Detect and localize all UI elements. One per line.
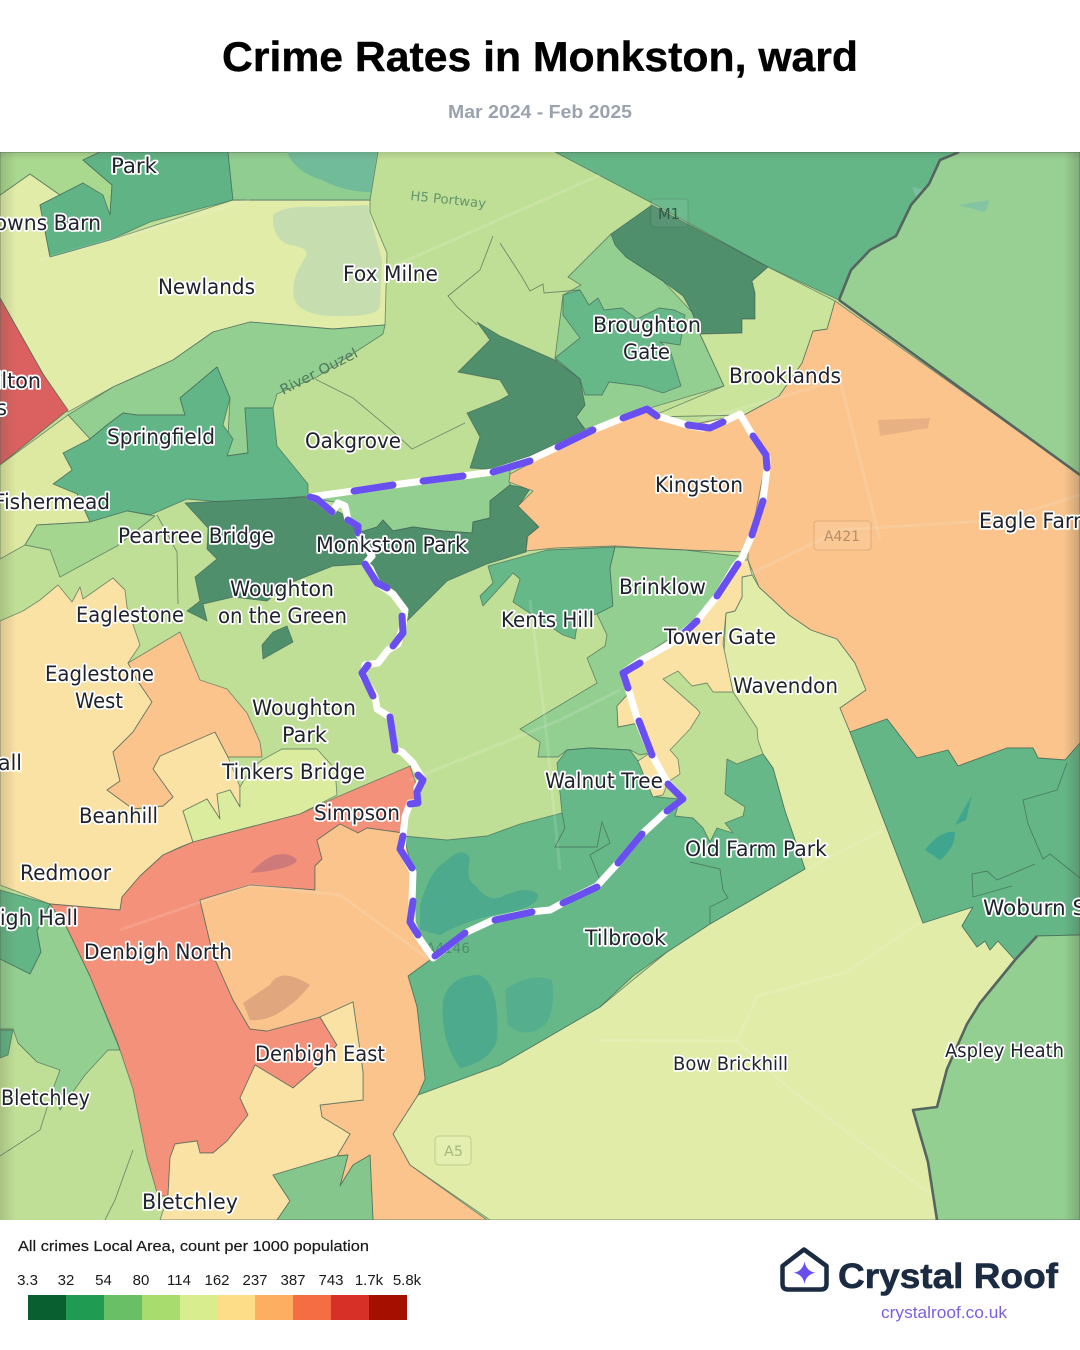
place name labels: Park: [282, 723, 328, 747]
region: top left: [0, 152, 112, 215]
legend colour scale: [28, 1295, 407, 1320]
region: Aspley Heath: [913, 935, 1080, 1220]
place name labels: Redmoor: [20, 861, 111, 885]
region: Giffard Park: [228, 152, 378, 200]
choropleth map: [0, 152, 1080, 1220]
place name labels: Bletchley: [1, 1086, 90, 1110]
map details: thin boundaries: [0, 236, 1080, 1220]
place name labels: Fox Milne: [343, 262, 438, 286]
road label: A421: A421: [824, 529, 860, 545]
place name labels: Walnut Tree: [545, 769, 663, 793]
legend values: [17, 1272, 422, 1289]
region: Milton: [0, 298, 68, 465]
place name labels: Kents Hill: [501, 608, 594, 632]
place name labels: on the Green: [218, 604, 347, 628]
place name labels: Bow Brickhill: [673, 1053, 788, 1075]
title: Crime Rates in Monkston, ward: [222, 33, 858, 80]
legend values: 743: [318, 1272, 344, 1289]
legend values: 114: [167, 1272, 191, 1289]
map edge vignette: [0, 152, 1080, 1220]
place name labels: Eaglestone: [76, 603, 184, 627]
region: north-east fields: [839, 152, 1080, 475]
region: Fishermead lower: [25, 511, 155, 577]
logo: Crystal Roof: [780, 1247, 1058, 1322]
region: Park: [40, 152, 233, 257]
ward boundary: Monkston: [310, 409, 767, 958]
region: Springfield: [53, 367, 308, 522]
place name labels: Tinkers Bridge: [221, 760, 365, 784]
place name labels: Tower Gate: [663, 625, 776, 649]
place name labels: Eaglestone: [45, 662, 154, 686]
place name labels: Park: [111, 154, 158, 178]
region: Bow Brickhill: [393, 575, 1015, 1220]
region: Woughton blob: [262, 626, 293, 659]
place name labels: Beanhill: [79, 804, 158, 828]
place name labels: Wavendon: [733, 674, 838, 698]
legend: [17, 1238, 422, 1320]
place name labels: Bletchley: [142, 1190, 238, 1214]
subtitle: date range: Mar 2024 - Feb 2025: [448, 101, 632, 122]
road label: A5: A5: [444, 1144, 463, 1160]
road label: H5 Portway: H5 Portway: [410, 189, 487, 212]
place name labels: Brinklow: [619, 575, 706, 599]
region: Monkston north: [310, 470, 510, 533]
road label: A4146: A4146: [426, 941, 470, 957]
road label: M1: M1: [658, 205, 680, 223]
place name labels: West: [75, 689, 123, 713]
region: Eagle Farm: [744, 301, 1080, 766]
region: Broughton Gate: [555, 290, 685, 395]
place name labels: [0, 154, 1080, 1214]
region: Broughton north fields: [555, 152, 959, 300]
legend values: 3.3: [17, 1272, 38, 1289]
website: crystalroof.co.uk: [881, 1304, 1008, 1322]
region: Tower Gate: [617, 560, 752, 797]
region: Tilbrook and Walnut Tree: [403, 748, 805, 1095]
region: Bletchley south green: [273, 1155, 373, 1220]
region: Denbigh orange: [200, 824, 487, 1220]
region: Willen lake: [273, 205, 382, 316]
region: Tinkers Bridge: [183, 749, 337, 842]
place name labels: Aspley Heath: [945, 1040, 1064, 1062]
region: Denbigh East cream: [160, 1002, 363, 1220]
region: Denbigh North: [50, 766, 418, 1196]
legend values: 237: [242, 1272, 268, 1289]
road label: A5: [435, 1136, 471, 1165]
region: Newlands: [0, 174, 387, 412]
region: Fishermead: [0, 415, 90, 559]
road label: A421: [814, 521, 871, 550]
region: Kents Hill: [480, 547, 615, 639]
place name labels: Simpson: [314, 801, 400, 825]
place name labels: Peartree Bridge: [118, 524, 274, 548]
place name labels: Denbigh North: [84, 940, 232, 964]
place name labels: Monkston Park: [316, 533, 468, 557]
place name labels: Denbigh East: [255, 1042, 385, 1066]
place name labels: Oakgrove: [305, 429, 401, 453]
region: Eaglestone and Beanhill: [0, 578, 240, 910]
legend values: 80: [133, 1272, 149, 1289]
region: Kingston: [509, 410, 766, 552]
legend values: 5.8k: [393, 1272, 422, 1289]
place name labels: Tilbrook: [584, 926, 667, 950]
place name labels: Woughton: [252, 696, 356, 720]
legend values: 162: [204, 1272, 230, 1289]
place name labels: Brooklands: [729, 364, 841, 388]
map details: roads: [40, 175, 1080, 1196]
place name labels: Newlands: [158, 275, 255, 299]
region: Springfield upper: [68, 322, 385, 456]
region: Atterbury dark: [458, 322, 585, 470]
region: Bletchley west: [0, 1030, 13, 1058]
brand name: Crystal Roof: [838, 1257, 1058, 1296]
region: Denbigh Hall: [0, 890, 50, 974]
legend values: 32: [58, 1272, 74, 1289]
region: top lake: [287, 152, 377, 192]
place name labels: Gate: [623, 340, 670, 364]
region: Broughton medium: [555, 234, 724, 429]
region: Brinklow: [520, 547, 746, 757]
region: Monkston Park: [185, 485, 538, 621]
place name labels: Old Farm Park: [685, 837, 828, 861]
region: Woburn east: [850, 719, 1080, 960]
icon: house with star: [782, 1250, 826, 1290]
region: Broughton dark: [611, 205, 768, 334]
map edges: thick boundaries: [839, 152, 1080, 1220]
legend values: 54: [95, 1272, 112, 1289]
map details: water and patches: [243, 187, 990, 1068]
legend values: 1.7k: [355, 1272, 384, 1289]
road label: M1: [651, 199, 688, 227]
road label: River Ouzel: River Ouzel: [278, 346, 361, 399]
region: Eaglestone West orange: [107, 632, 262, 809]
region: Brooklands: [650, 267, 835, 417]
legend values: 387: [280, 1272, 306, 1289]
place name labels: Springfield: [107, 425, 215, 449]
legend title: All crimes Local Area, count per 1000 population: [18, 1238, 369, 1255]
place name labels: Woughton: [230, 577, 334, 601]
place name labels: Kingston: [655, 473, 743, 497]
region: Bletchley medium: [0, 904, 120, 1110]
place name labels: Broughton: [593, 313, 701, 337]
